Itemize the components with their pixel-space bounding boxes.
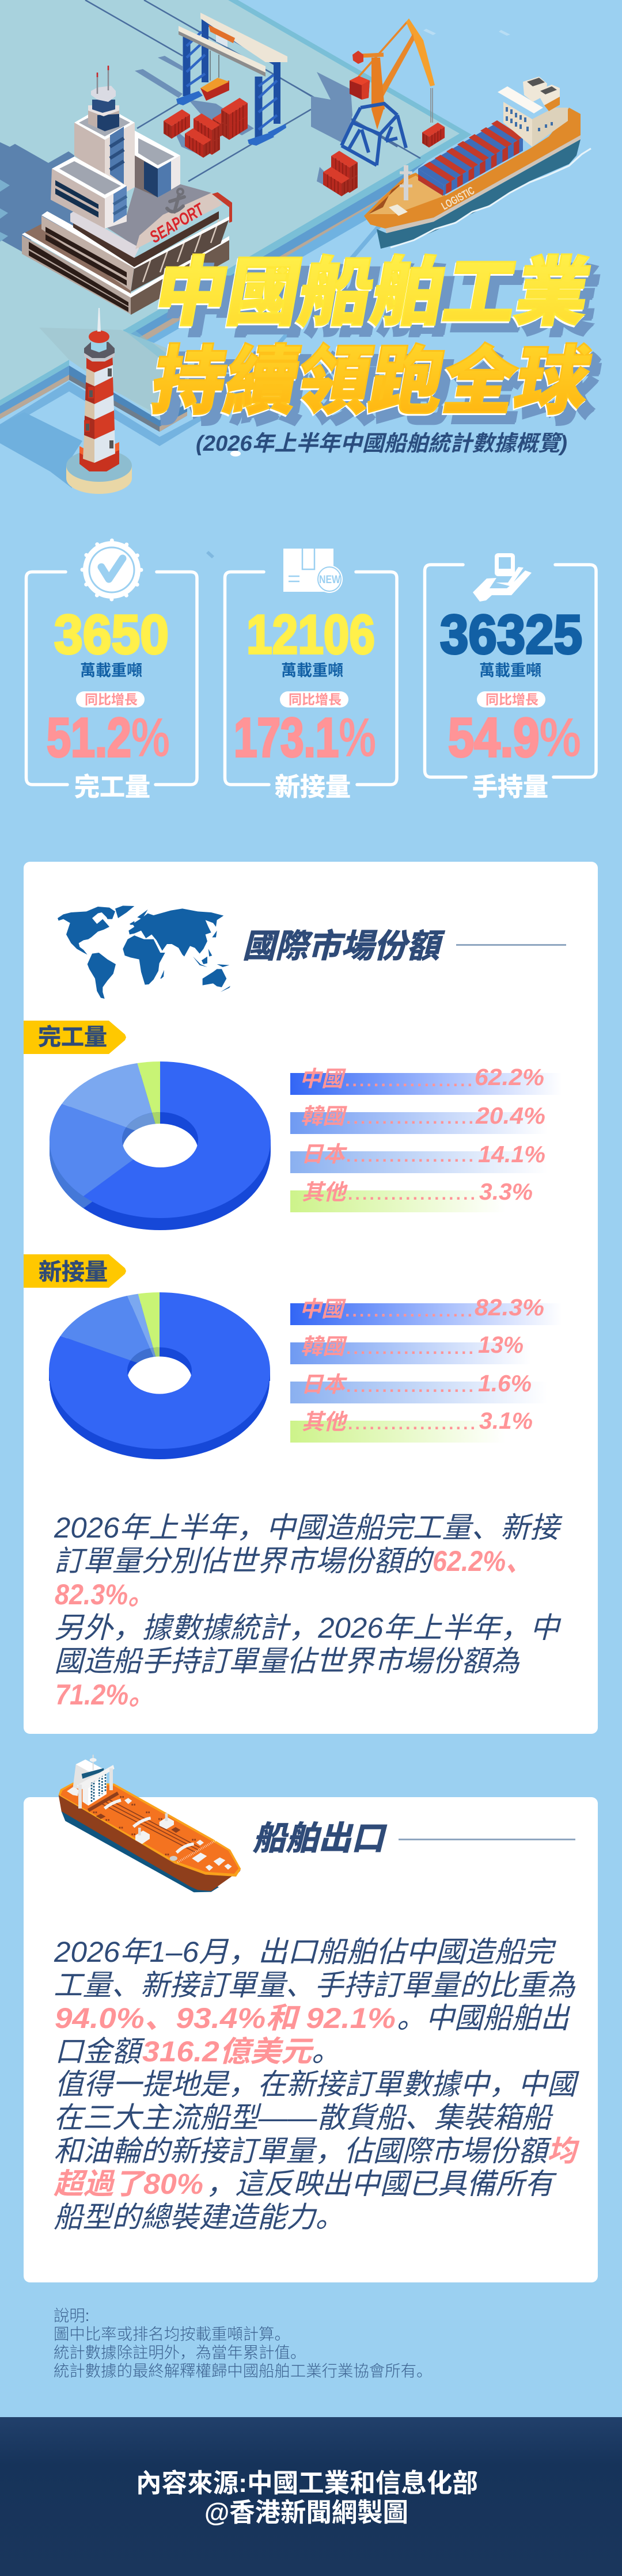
- text block: market share summary: 訂單量分別佔世界市場份額的: [54, 1544, 434, 1577]
- text block: ship export summary: 在三大主流船型——散貨船、集裝箱船: [54, 2101, 554, 2134]
- anchor statue: [167, 189, 184, 212]
- growth pill: [477, 691, 545, 707]
- notes: 圖中比率或排名均按載重噸計算。: [54, 2325, 290, 2343]
- legend: completed: ..................: [346, 1109, 473, 1128]
- title: [146, 250, 597, 423]
- hero illustration: seaport: [0, 0, 591, 558]
- lighthouse: [0, 308, 132, 494]
- legend: completed: ..................: [345, 1071, 472, 1090]
- quay and pier: [0, 0, 472, 446]
- sea glints: [206, 29, 510, 558]
- bracket frame: [425, 565, 596, 777]
- text block: market share summary: 71.2%。: [55, 1678, 154, 1711]
- text block: ship export summary: 超過了80%: [54, 2167, 203, 2200]
- panel: ship exports: [24, 1755, 598, 2282]
- text block: ship export summary: 口金額: [55, 2035, 145, 2068]
- icon: check badge: [82, 541, 141, 599]
- sea highlight dot: [230, 451, 241, 456]
- tag: new orders: [24, 1254, 126, 1288]
- stat card: order backlog: 36325: [440, 604, 582, 665]
- legend: completed: 中國: [299, 1067, 346, 1091]
- bracket frame: [26, 572, 197, 785]
- legend: new orders: ..................: [348, 1414, 475, 1433]
- ship name: LOGISTIC: [439, 185, 477, 212]
- icon: world map: [58, 905, 230, 999]
- legend: new orders: ..................: [346, 1339, 473, 1358]
- container ship: [364, 77, 591, 249]
- text block: ship export summary: ，這反映出中國已具備所有: [206, 2167, 557, 2200]
- heading rule: [456, 944, 566, 946]
- text block: ship export summary: 均: [547, 2134, 580, 2167]
- building shadow: [0, 142, 74, 252]
- stat card: order backlog: 萬載重噸: [479, 662, 541, 679]
- stat card: new orders: 12106: [246, 604, 375, 665]
- icon: tanker ship: [59, 1755, 241, 1892]
- text block: market share summary: 國造船手持訂單量佔世界市場份額為: [54, 1645, 520, 1677]
- tag: completed: 完工量: [38, 1025, 107, 1050]
- harbour crane: [342, 18, 445, 165]
- text block: ship export summary: 2026年1–6月，出口船舶佔中國造船完: [54, 1935, 557, 1968]
- gantry crane: [176, 13, 287, 146]
- legend: new orders: [290, 1294, 576, 1443]
- stat card: completed: [26, 541, 197, 801]
- legend: new orders: 1.6%: [478, 1370, 532, 1397]
- text block: market share summary: 62.2%、: [433, 1544, 532, 1577]
- text block: ship export summary: 。中國船舶出: [397, 2002, 570, 2034]
- legend: new orders: ..................: [345, 1302, 472, 1321]
- container stacks on quay: [164, 98, 358, 196]
- legend: new orders: ..................: [346, 1377, 473, 1396]
- legend: completed: 日本: [301, 1143, 348, 1167]
- title: 持續領跑全球: [146, 339, 597, 423]
- ground shadows: [135, 56, 352, 193]
- legend: completed: 韓國: [301, 1105, 347, 1129]
- notes: 統計數據除註明外，為當年累計值。: [54, 2343, 306, 2361]
- heading: 國際市場份額: [242, 928, 445, 965]
- text block: ship export summary: [54, 1935, 580, 2233]
- legend: new orders: 韓國: [301, 1335, 347, 1359]
- road lines: [85, 0, 420, 181]
- legend: new orders: 中國: [299, 1297, 346, 1322]
- heading: 船舶出口: [253, 1820, 387, 1857]
- notes: 統計數據的最終解釋權歸中國船舶工業行業協會所有。: [54, 2362, 432, 2380]
- text block: market share summary: [54, 1511, 563, 1711]
- footer: 內容來源:中國工業和信息化部: [136, 2468, 478, 2498]
- stat card: completed: 51.2%: [47, 707, 170, 768]
- stat card: completed: 完工量: [74, 773, 150, 801]
- stat card: completed: 同比增長: [85, 692, 138, 707]
- legend: new orders: 日本: [301, 1373, 348, 1397]
- legend: completed: ..................: [348, 1185, 475, 1204]
- icon: new box: NEW: [319, 574, 340, 586]
- text block: ship export summary: 94.0%、93.4%和 92.1%: [55, 2002, 396, 2034]
- donut chart: new orders: [49, 1292, 270, 1459]
- text block: ship export summary: 316.2億美元: [142, 2035, 314, 2068]
- legend: completed: 3.3%: [479, 1178, 533, 1205]
- text block: ship export summary: 工量、新接訂單量、手持訂單量的比重為: [54, 1969, 576, 2002]
- stat card: order backlog: 同比增長: [486, 692, 538, 707]
- stat card: order backlog: 手持量: [472, 773, 548, 801]
- icon: hand holding phone: [473, 553, 532, 602]
- legend: new orders: 13%: [478, 1331, 524, 1358]
- legend: new orders: 其他: [302, 1410, 348, 1435]
- text block: ship export summary: 值得一提地是，在新接訂單數據中，中國: [55, 2068, 579, 2101]
- text block: ship export summary: 。: [312, 2035, 341, 2068]
- notes: [54, 2307, 432, 2380]
- bracket frame: [225, 572, 397, 785]
- growth pill: [280, 691, 348, 707]
- donut chart: completed: [50, 1061, 271, 1230]
- stat card: order backlog: [425, 553, 596, 801]
- text block: market share summary: 82.3%。: [55, 1578, 154, 1611]
- legend: new orders: 3.1%: [479, 1407, 533, 1434]
- text block: market share summary: 另外，據數據統計，2026年上半年，中: [54, 1611, 562, 1644]
- stat card: new orders: 同比增長: [289, 692, 342, 707]
- stat card: new orders: [225, 549, 397, 801]
- seaport sign: SEAPORT: [147, 200, 208, 247]
- stat card: new orders: 新接量: [275, 773, 351, 801]
- text block: ship export summary: 和油輪的新接訂單量，佔國際市場份額: [54, 2134, 552, 2167]
- icon: new box: [283, 549, 343, 593]
- growth pill: [76, 691, 145, 707]
- title: 中國船舶工業: [149, 250, 597, 334]
- stat card: order backlog: 54.9%: [448, 707, 581, 768]
- footer: [0, 2417, 622, 2576]
- stat card: new orders: 萬載重噸: [281, 662, 343, 679]
- heading rule: [399, 1839, 575, 1840]
- subtitle: (2026年上半年中國船舶統計數據概覽): [196, 432, 567, 456]
- legend: completed: 14.1%: [478, 1141, 545, 1167]
- footer: @香港新聞網製圖: [204, 2498, 408, 2527]
- stat card: completed: 萬載重噸: [80, 662, 142, 679]
- text block: ship export summary: 船型的總裝建造能力。: [54, 2201, 344, 2233]
- notes: 說明:: [54, 2307, 89, 2324]
- legend: completed: ..................: [346, 1147, 473, 1166]
- tag: completed: [24, 1021, 126, 1054]
- legend: completed: [290, 1064, 576, 1212]
- panel: international market share: [24, 862, 598, 1734]
- stat card: completed: 3650: [54, 604, 169, 665]
- stat card: new orders: 173.1%: [234, 707, 376, 768]
- seaport building: [22, 66, 232, 315]
- legend: completed: 20.4%: [475, 1102, 545, 1129]
- legend: new orders: 82.3%: [475, 1294, 544, 1321]
- legend: completed: 其他: [302, 1181, 348, 1205]
- tag: new orders: 新接量: [39, 1260, 108, 1285]
- legend: completed: 62.2%: [475, 1064, 544, 1090]
- text block: market share summary: 2026年上半年，中國造船完工量、新接: [54, 1511, 563, 1544]
